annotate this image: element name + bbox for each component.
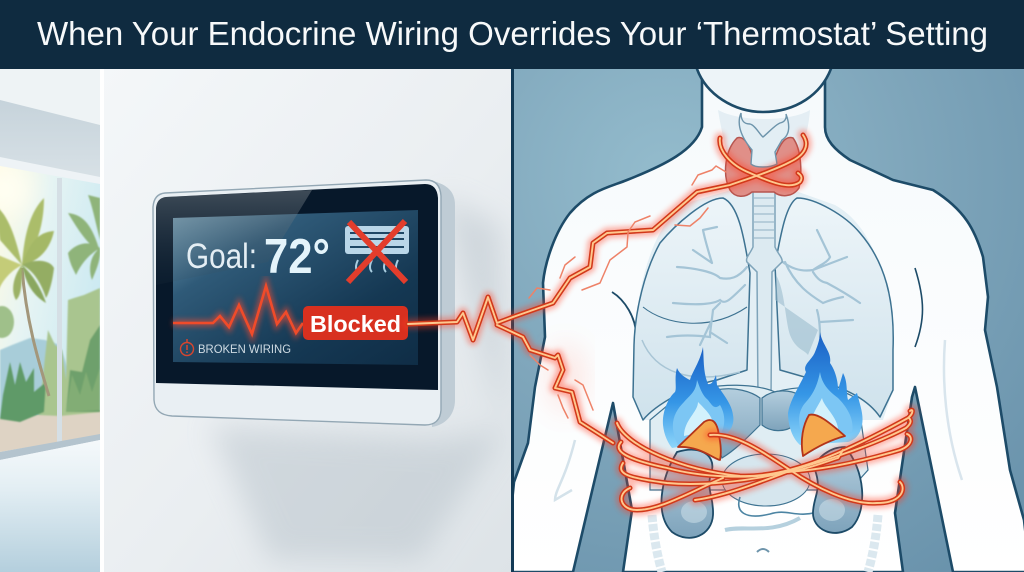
left kidney — [661, 450, 713, 538]
trachea — [747, 190, 782, 400]
divider — [511, 69, 514, 572]
red wires — [408, 135, 912, 510]
ECG line — [173, 286, 303, 334]
floor — [0, 440, 100, 572]
goal temperature: 72° — [264, 230, 330, 284]
window view — [0, 160, 100, 460]
wire glow — [408, 135, 912, 510]
torso and arms silhouette — [505, 80, 1024, 572]
window sill — [0, 434, 100, 460]
abdominal organs — [650, 385, 878, 572]
shoulder and muscle shading — [555, 268, 962, 500]
neck shading — [718, 110, 810, 153]
blocked badge — [303, 306, 408, 340]
thyroid gland — [726, 137, 801, 196]
title: When Your Endocrine Wiring Overrides Your ‘Thermostat’ Setting — [37, 15, 988, 52]
deck — [0, 410, 100, 452]
panel: room with window — [0, 69, 100, 572]
title bar — [0, 0, 1024, 69]
goal label: Goal: — [186, 237, 257, 276]
inner display — [173, 210, 418, 365]
small sparks — [529, 166, 726, 418]
right kidney — [813, 447, 862, 533]
ECG wire glow — [173, 286, 303, 334]
screen — [156, 184, 438, 390]
thyroid cartilage — [739, 113, 789, 167]
icon: right blue flame — [788, 332, 863, 445]
icon: left blue flame — [663, 347, 733, 448]
panel: body illustration — [505, 66, 1024, 572]
icon: air conditioner crossed out — [345, 221, 409, 282]
right lung — [775, 198, 893, 417]
wire highlight — [408, 135, 912, 510]
head and chin — [696, 66, 832, 112]
left lung — [633, 198, 750, 420]
blocked badge: Blocked — [310, 311, 401, 337]
wire outline — [408, 135, 912, 510]
second palm — [68, 195, 100, 280]
icon: left adrenal gland — [678, 420, 721, 460]
distant hills — [0, 338, 70, 420]
palm crown — [0, 198, 54, 303]
arm glow patch — [548, 344, 584, 412]
bushes — [0, 288, 100, 422]
chest tint — [633, 180, 893, 420]
panel: wall — [100, 69, 512, 572]
icon: warning — [180, 339, 194, 356]
icon: right adrenal gland — [802, 415, 845, 456]
window mullion — [57, 178, 62, 442]
thermostat device — [153, 180, 455, 427]
palm trunk — [22, 268, 49, 396]
broken wiring label: BROKEN WIRING — [198, 344, 291, 356]
